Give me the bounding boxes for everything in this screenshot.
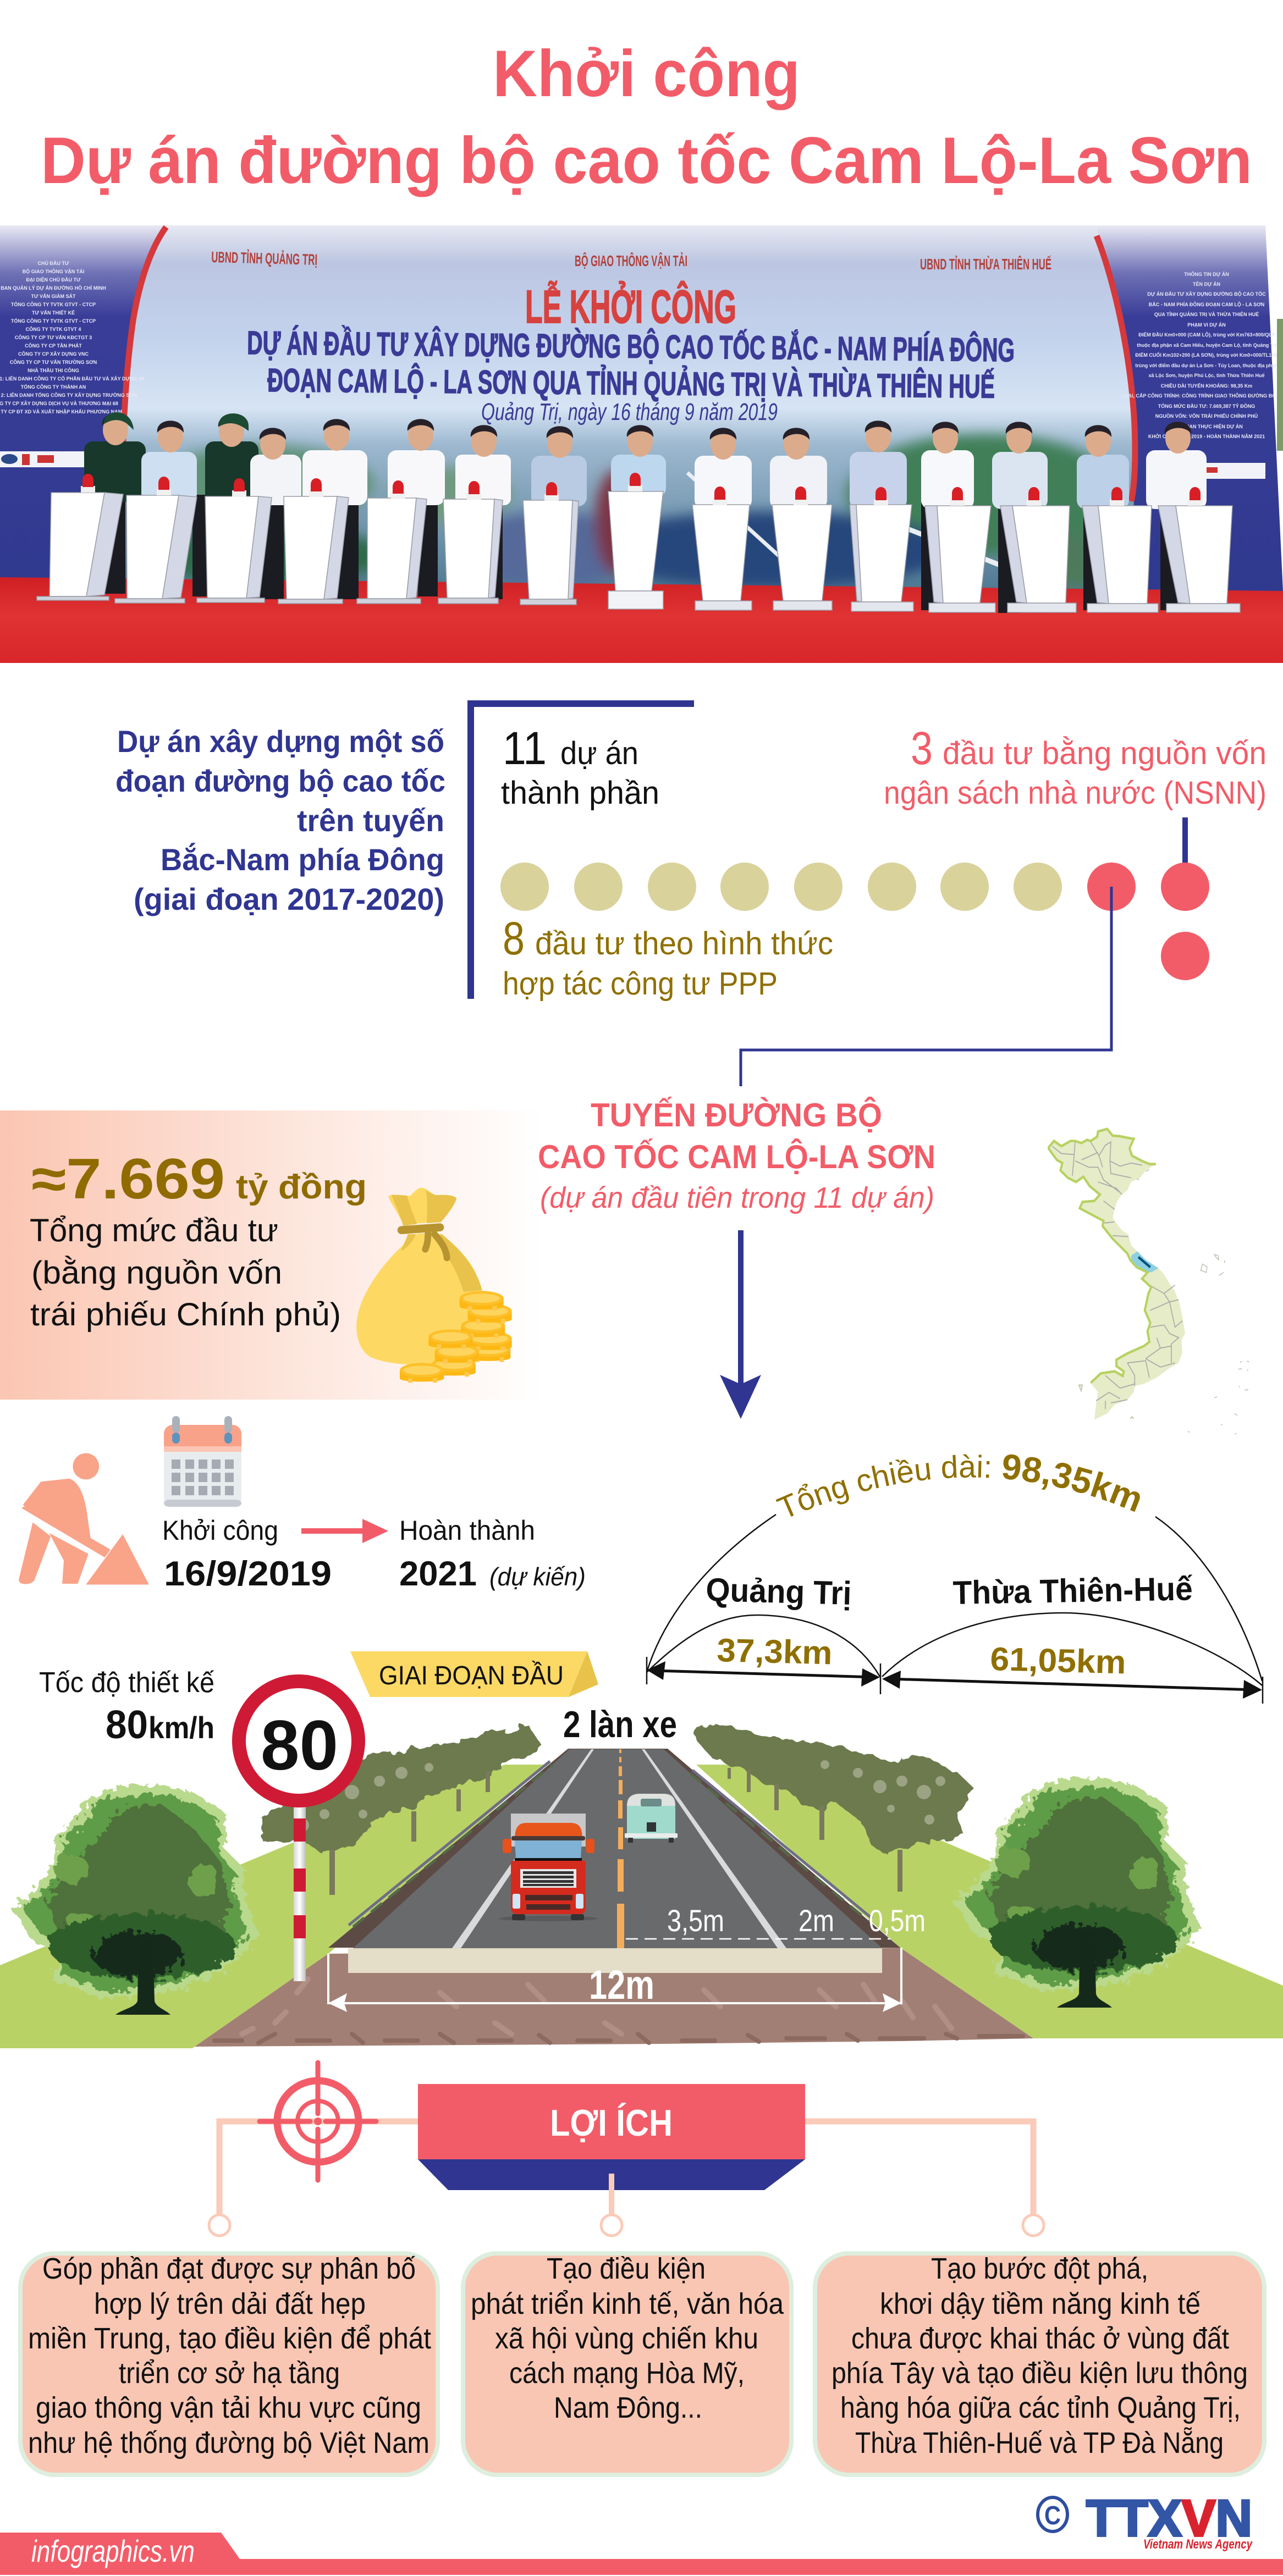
- banner text: UBND TỈNH QUẢNG TRỊ: [211, 248, 318, 268]
- right panel small text: [1121, 271, 1283, 439]
- tree: left: [12, 1784, 258, 2015]
- banner text: [211, 248, 1051, 405]
- roadside tree rows: [262, 1724, 974, 1895]
- left panel small text: CÔNG TY CP TÂN PHÁT: [25, 342, 82, 349]
- banner text: BỘ GIAO THÔNG VẬN TẢI: [575, 252, 687, 269]
- icon: truck: [499, 1814, 598, 1921]
- connector: state budget to dots: [1182, 817, 1188, 864]
- banner text: UBND TỈNH THỪA THIÊN HUẾ: [920, 255, 1051, 273]
- timeline: completion date: 2021: [399, 1555, 477, 1593]
- right panel small text: thuộc địa phận xã Cam Hiếu, huyện Cam Lộ, tỉnh Quảng Trị: [1137, 342, 1276, 348]
- card: benefit 2: Nam Đông...: [554, 2391, 702, 2424]
- card: benefit 3: [815, 2252, 1264, 2475]
- left panel small text: [0, 260, 144, 414]
- text: 11 sub-projects: 11: [503, 722, 547, 774]
- icon: construction worker: [19, 1453, 149, 1585]
- card: benefit 3: khơi dậy tiềm năng kinh tế: [880, 2287, 1201, 2320]
- investment panel: ≈7.669: [31, 1147, 225, 1211]
- card: benefit 1: hợp lý trên dải đất hẹp: [94, 2287, 366, 2320]
- speed limit sign: [232, 1674, 365, 1981]
- project intro text: [115, 724, 445, 916]
- guard rails: [349, 1761, 872, 1925]
- banner text: LỄ KHỞI CÔNG: [525, 281, 736, 333]
- photo: groundbreaking ceremony: [0, 225, 1283, 663]
- left panel small text: CÔNG TY TVTK GTVT 4: [26, 326, 81, 332]
- investment panel: [0, 1110, 542, 1400]
- timeline: completion date: (dự kiến): [489, 1562, 586, 1591]
- timeline: completion date: Hoàn thành: [399, 1515, 535, 1546]
- length diagram: Tổng chiều dài: 98,35km: [775, 1455, 1140, 1517]
- flag: first phase: [350, 1651, 598, 1697]
- timeline: completion date: [399, 1515, 586, 1593]
- photo: groundbreaking ceremony: Quảng Trị, ngày 16 tháng 9 năm 2019: [481, 399, 778, 425]
- title: Khởi công: [493, 37, 800, 110]
- asphalt: [353, 1749, 882, 1948]
- design speed label: Tốc độ thiết kế: [39, 1667, 214, 1699]
- length diagram: Thừa Thiên-Huế: [952, 1570, 1193, 1611]
- heading: Cam Lo - La Son route: CAO TỐC CAM LỘ-LA SƠN: [538, 1138, 935, 1175]
- timeline: start date: 16/9/2019: [164, 1555, 332, 1593]
- length diagram: 61,05km: [990, 1640, 1126, 1681]
- card: benefit 2: xã hội vùng chiến khu: [495, 2322, 758, 2355]
- icon: van: [625, 1794, 678, 1843]
- timeline: start date: Khởi công: [162, 1515, 278, 1546]
- bracket: [471, 704, 694, 999]
- project intro text: Bắc-Nam phía Đông: [161, 842, 444, 877]
- right panel small text: DỰ ÁN ĐẦU TƯ XÂY DỰNG ĐƯỜNG BỘ CAO TỐC: [1147, 291, 1266, 297]
- length diagram: [646, 1455, 1264, 1704]
- text: 8 PPP: [503, 913, 833, 1002]
- card: benefit 3: hàng hóa giữa các tỉnh Quảng Trị,: [840, 2391, 1241, 2424]
- left panel small text: TƯ VẤN THIẾT KẾ: [32, 310, 75, 316]
- left panel small text: TỔNG CÔNG TY TVTK GTVT - CTCP: [11, 301, 96, 307]
- people: [84, 412, 1207, 509]
- right panel small text: PHẠM VI DỰ ÁN: [1187, 322, 1226, 328]
- design speed label: 80: [106, 1703, 148, 1747]
- podiums: [37, 491, 1240, 612]
- icon: calendar: [164, 1416, 241, 1507]
- lane markings: [452, 1749, 786, 1948]
- left panel small text: BỘ GIAO THÔNG VẬN TẢI: [23, 268, 84, 274]
- text: 11 sub-projects: thành phần: [501, 775, 659, 811]
- benefits heading: LỢI ÍCH: [550, 2102, 673, 2144]
- right panel small text: xã Lộc Sơn, huyện Phú Lộc, tỉnh Thừa Thiên Huế: [1149, 373, 1265, 378]
- card: benefit 2: [463, 2252, 791, 2475]
- left panel small text: CÔNG TY CP TƯ VẤN KĐCTGT 3: [15, 334, 92, 340]
- right panel small text: ĐIỂM ĐẦU Km0+000 (CAM LỘ), trùng với Km763+800/QL9: [1138, 331, 1275, 338]
- text: 2 lanes: 2 làn xe: [563, 1704, 677, 1745]
- timeline: start date: [162, 1515, 332, 1593]
- road base: [348, 1948, 882, 1973]
- right panel small text: TỔNG MỨC ĐẦU TƯ: 7.669,387 TỶ ĐỒNG: [1158, 403, 1255, 409]
- right panel small text: QUA TỈNH QUẢNG TRỊ VÀ THỪA THIÊN HUẾ: [1154, 311, 1259, 317]
- text: 8 PPP: đầu tư theo hình thức: [535, 926, 833, 961]
- project intro text: (giai đoạn 2017-2020): [134, 882, 444, 916]
- left panel small text: NHÀ THẦU THI CÔNG: [27, 367, 79, 373]
- left panel small text: TỔNG CÔNG TY TVTK GTVT - CTCP: [11, 318, 96, 324]
- footer: infographics.vn: [31, 2534, 195, 2568]
- map of Vietnam: [1048, 1129, 1249, 1434]
- investment panel: tỷ đồng: [236, 1168, 367, 1206]
- text: 3 state budget: đầu tư bằng nguồn vốn: [943, 736, 1267, 771]
- red buttons: [81, 473, 1202, 506]
- project intro text: đoạn đường bộ cao tốc: [115, 764, 445, 798]
- card: benefit 1: miền Trung, tạo điều kiện để phát: [28, 2322, 431, 2355]
- dots: 11 sub-projects: [500, 863, 1209, 980]
- investment panel: trái phiếu Chính phủ): [30, 1297, 341, 1333]
- card: benefit 3: chưa được khai thác ở vùng đất: [851, 2322, 1229, 2355]
- card: benefit 3: Thừa Thiên-Huế và TP Đà Nẵng: [855, 2426, 1224, 2459]
- investment panel: (bằng nguồn vốn: [31, 1255, 282, 1291]
- lane widths: [667, 1903, 926, 1938]
- card: benefit 2: Tạo điều kiện: [547, 2252, 706, 2285]
- benefit connectors: [209, 2121, 1044, 2236]
- icon: target: [260, 2063, 376, 2180]
- benefits heading: [418, 2084, 805, 2190]
- heading: Cam Lo - La Son route: TUYẾN ĐƯỜNG BỘ: [591, 1097, 882, 1134]
- lane widths: 2m: [799, 1903, 834, 1938]
- speed limit sign: 80: [261, 1706, 338, 1785]
- left panel small text: BAN QUẢN LÝ DỰ ÁN ĐƯỜNG HỒ CHÍ MINH: [1, 285, 106, 291]
- right panel small text: THÔNG TIN DỰ ÁN: [1184, 271, 1229, 277]
- right panel small text: BẮC - NAM PHÍA ĐÔNG ĐOẠN CAM LỘ - LA SƠN: [1149, 301, 1264, 307]
- text: 8 PPP: 8: [503, 913, 525, 964]
- card: benefit 2: phát triển kinh tế, văn hóa: [471, 2287, 784, 2320]
- flag: first phase: GIAI ĐOẠN ĐẦU: [379, 1661, 564, 1690]
- soil: [195, 1948, 1033, 2047]
- road scene: [0, 1704, 1283, 2048]
- logo: TTXVN: TTXVN: [1086, 2489, 1252, 2547]
- design speed label: [39, 1667, 214, 1747]
- text: 11 sub-projects: dự án: [560, 736, 638, 771]
- carpet: [0, 577, 1283, 663]
- lane widths: 0,5m: [869, 1903, 926, 1938]
- right panel small text: THỜI GIAN THỰC HIỆN DỰ ÁN: [1170, 423, 1243, 429]
- heading: Cam Lo - La Son route: (dự án đầu tiên trong 11 dự án): [540, 1181, 934, 1214]
- footer: [0, 2533, 1283, 2575]
- card: benefit 3: Tạo bước đột phá,: [931, 2252, 1148, 2285]
- length diagram: 37,3km: [717, 1632, 833, 1671]
- logo: TTXVN: C: [1044, 2501, 1061, 2530]
- length diagram: Quảng Trị: [706, 1571, 852, 1612]
- left panel small text: CHỦ ĐẦU TƯ: [38, 260, 69, 266]
- width dimension 12m: [328, 1948, 901, 2012]
- legs: [104, 489, 1179, 613]
- card: benefit 1: [20, 2252, 438, 2475]
- right panel small text: NGUỒN VỐN: VỐN TRÁI PHIẾU CHÍNH PHỦ: [1155, 413, 1258, 419]
- arrow: start to finish: [301, 1519, 388, 1543]
- card: benefit 3: phía Tây và tạo điều kiện lưu thông: [832, 2357, 1248, 2390]
- card: benefit 1: giao thông vận tải khu vực cũng: [36, 2391, 421, 2424]
- right panel small text: ĐIỂM CUỐI Km102+200 (LA SƠN), trùng với Km0+000/TL14B: [1135, 352, 1278, 358]
- investment panel: Tổng mức đầu tư: [30, 1213, 278, 1248]
- project intro text: trên tuyến: [297, 803, 444, 838]
- card: benefit 2: cách mạng Hòa Mỹ,: [509, 2357, 745, 2390]
- card: benefit 1: như hệ thống đường bộ Việt Nam: [28, 2426, 429, 2459]
- width dimension 12m: 12m: [589, 1962, 654, 2008]
- project intro text: Dự án xây dựng một số: [117, 724, 444, 759]
- left panel small text: CÔNG TY CP XÂY DỰNG VNC: [18, 351, 89, 357]
- right panel small text: TÊN DỰ ÁN: [1193, 281, 1220, 287]
- arrow down: [720, 1230, 761, 1419]
- card: benefit 1: Góp phần đạt được sự phân bố: [42, 2252, 416, 2285]
- banner background: [122, 226, 1135, 591]
- left panel small text: ĐẠI DIỆN CHỦ ĐẦU TƯ: [26, 277, 81, 283]
- right panel small text: CHIỀU DÀI TUYẾN KHOẢNG: 98,35 Km: [1161, 383, 1252, 389]
- text: 3 state budget: [884, 722, 1267, 811]
- title: [41, 37, 1252, 197]
- design speed label: km/h: [148, 1710, 214, 1745]
- tree: right: [954, 1777, 1200, 2008]
- icon: money bag and coins: [356, 1188, 512, 1383]
- connector line: [741, 887, 1111, 1086]
- left panel small text: CÔNG TY CP TƯ VẤN TRƯỜNG SƠN: [10, 359, 97, 365]
- grass: [0, 1765, 1283, 2048]
- card: benefit 1: triển cơ sở hạ tầng: [119, 2357, 340, 2390]
- text: 11 sub-projects: [501, 722, 659, 811]
- logo: TTXVN: Vietnam News Agency: [1143, 2537, 1253, 2552]
- shoulder: [328, 1749, 900, 1948]
- left panel small text: TỔNG CÔNG TY THÀNH AN: [21, 384, 86, 390]
- lane widths: 3,5m: [667, 1903, 724, 1938]
- right panel small text: trùng với điểm đầu dự án La Sơn - Túy Loan, thuộc địa phận: [1135, 363, 1278, 368]
- text: 3 state budget: 3: [911, 722, 933, 774]
- heading: Cam Lo - La Son route: [538, 1097, 935, 1214]
- right panel small text: KHỞI CÔNG NĂM 2019 - HOÀN THÀNH NĂM 2021: [1148, 433, 1265, 439]
- left panel small text: TƯ VẤN GIÁM SÁT: [31, 294, 76, 299]
- landscape behind stage: [137, 434, 1122, 588]
- text: 8 PPP: hợp tác công tư PPP: [503, 966, 778, 1002]
- red arc stripes: [122, 227, 166, 495]
